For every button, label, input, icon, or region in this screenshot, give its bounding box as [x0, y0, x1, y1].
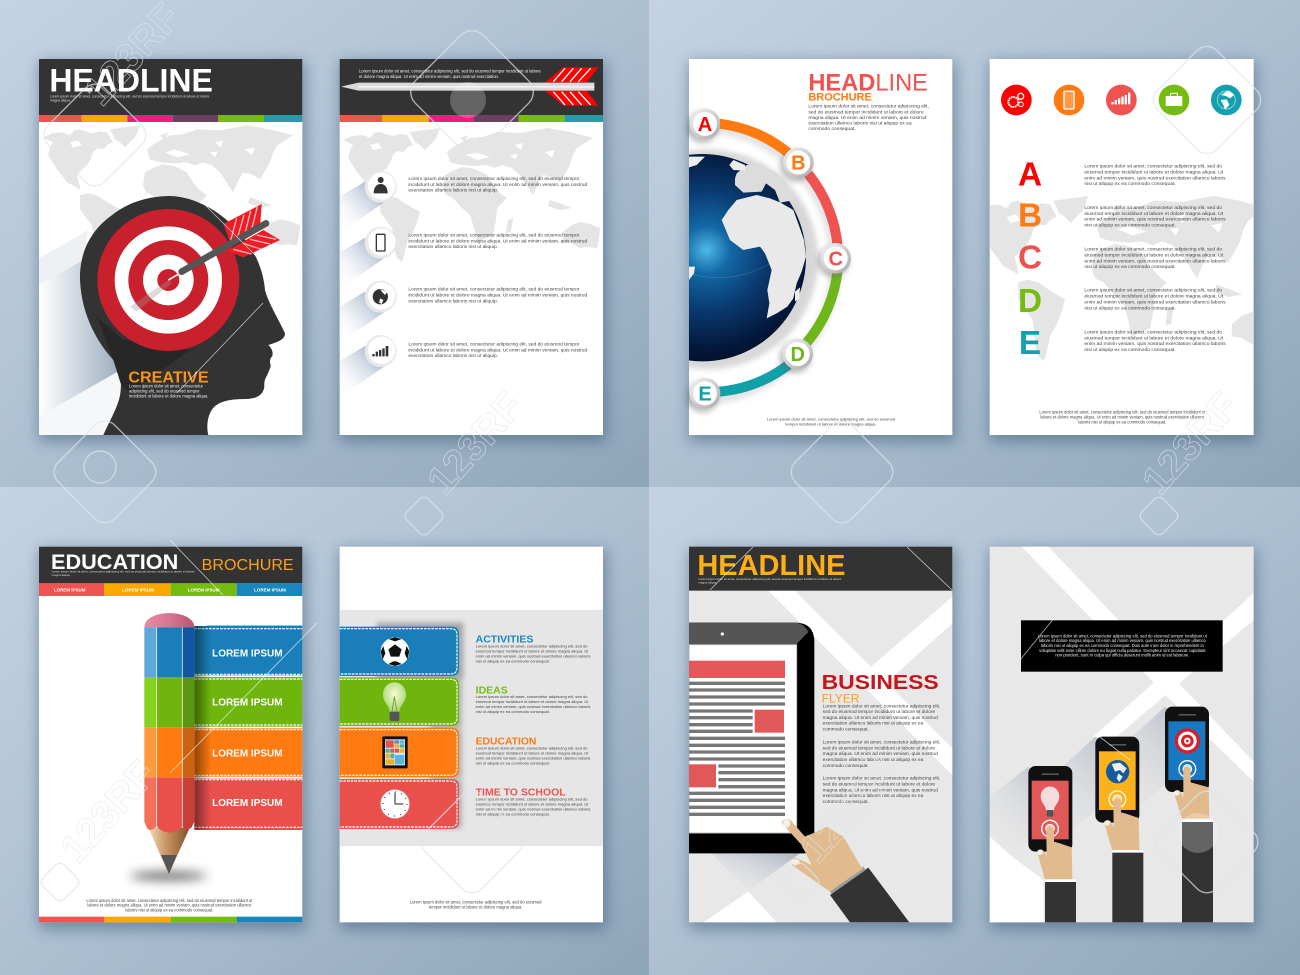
tablet [689, 623, 814, 853]
tablet shadow [712, 854, 800, 883]
node A: A [698, 114, 712, 136]
colour strip [340, 115, 603, 122]
title: headline: HEADLINE [808, 71, 928, 97]
text 3: exercitation ullamco laboris nisi ut aliquip. [408, 298, 498, 304]
text B: eiusmod tempor incididunt ut labore et dolore magna aliqua. Ut [1084, 211, 1224, 217]
text 1: incididunt ut labore et dolore magna aliqua. Ut enim ad minim veniam, quis nostrud [408, 182, 587, 188]
phone 1 with hand [1028, 766, 1076, 922]
footer text [1039, 410, 1206, 425]
icon: phone [1054, 85, 1084, 115]
target shadow on head [97, 317, 190, 393]
globe shadow [689, 148, 820, 372]
paragraph 2 [823, 740, 940, 769]
tab: ideas [340, 677, 462, 728]
header bar [689, 547, 952, 591]
text: activities: Lorem ipsum dolor sit amet, consectetur adipiscing elit, sed do [476, 644, 588, 649]
watermark marks: 123RF [1134, 384, 1247, 503]
ribbons: LOREM IPSUM [212, 698, 283, 709]
panel: A to E list page [975, 59, 1275, 442]
intro text: exercitation ullamco laboris nisi ut aliquip ex ea [808, 120, 912, 126]
footer text: laboris nisi ut aliquip ex ea commodo consequat. [125, 908, 213, 913]
item: person icon [340, 171, 397, 230]
phone long shadows [993, 766, 1030, 830]
text: time to school: enim ad minim veniam, quis nostrud exercitation ullamco laboris [476, 806, 590, 811]
text D: Lorem ipsum dolor sit amet, consectetur adipiscing elit, sed do [1084, 288, 1222, 294]
paragraph 3 [823, 776, 940, 805]
dart [168, 204, 280, 280]
text 1: Lorem ipsum dolor sit amet, consectetur adipiscing elit, sed do eiusmod tempor [408, 176, 580, 182]
node A [687, 109, 720, 143]
footer text: tempor incididunt ut labore et dolore magna aliqua. [429, 904, 522, 909]
menu tabs: LOREM IPSUM [254, 588, 286, 593]
node D [779, 339, 813, 373]
menu tabs [39, 583, 302, 596]
text: education: eiusmod tempor incididunt ut labore et dolore magna aliqua. Ut [476, 750, 589, 755]
paragraph 2: Lorem ipsum dolor sit amet, consectetur adipiscing elit, [823, 740, 940, 746]
header bar [39, 547, 302, 583]
phone 3 with hand [1165, 707, 1213, 922]
panel: education brochure page [39, 547, 306, 929]
text A: nisi ut aliquip ex ea commodo consequat. [1084, 181, 1176, 187]
colour strip [39, 115, 302, 122]
item: phone icon [340, 227, 397, 286]
text 4: Lorem ipsum dolor sit amet, consectetur adipiscing elit, sed do eiusmod tempor [408, 342, 580, 348]
pencil [130, 613, 207, 880]
intro text: magna aliqua. Ut enim ad minim veniam, quis nostrud [808, 115, 927, 121]
text: ideas: Lorem ipsum dolor sit amet, consectetur adipiscing elit, sed do [476, 694, 588, 699]
footer text: Lorem ipsum dolor sit amet, consectetur adipiscing elit, sed do eiusmod [410, 899, 542, 904]
panel: business flyer page [689, 547, 956, 929]
white diagonal bands [703, 591, 952, 922]
bottom strip [39, 917, 302, 922]
head silhouette [80, 196, 285, 435]
text D: eiusmod tempor incididunt ut labore et dolore magna aliqua. Ut [1084, 294, 1224, 300]
text: ideas: eiusmod tempor incididunt ut labore et dolore magna aliqua. Ut [476, 699, 589, 704]
text box: voluptate velit esse cillum dolore eu fugiat nulla pariatur. Excepteur sint occaecat cupidatat [1039, 648, 1206, 653]
text A: enim ad minim veniam, quis nostrud exercitation ullamco laboris [1084, 175, 1226, 181]
ribbons [194, 625, 302, 830]
text: activities: eiusmod tempor incididunt ut labore et dolore magna aliqua. Ut [476, 649, 589, 654]
paragraph 1: commodo consequat. [823, 727, 869, 733]
text box [1021, 620, 1223, 672]
text 3: Lorem ipsum dolor sit amet, consectetur adipiscing elit, sed do eiusmod tempor [408, 287, 580, 293]
ribbons: LOREM IPSUM [212, 649, 283, 660]
creative body text [129, 384, 208, 399]
text E [1084, 329, 1226, 353]
title: headline: HEADLINE [697, 550, 845, 582]
text: education: Lorem ipsum dolor sit amet, consectetur adipiscing elit, sed do [476, 745, 588, 750]
menu tabs: LOREM IPSUM [188, 588, 220, 593]
text: time to school: eiusmod tempor incididunt ut labore et dolore magna aliqua. Ut [476, 801, 589, 806]
letter D: D [1018, 283, 1042, 320]
text E: Lorem ipsum dolor sit amet, consectetur adipiscing elit, sed do [1084, 329, 1222, 335]
panel: activities page [340, 547, 606, 929]
menu tabs: LOREM IPSUM [122, 588, 154, 593]
header text [52, 569, 195, 577]
creative body text: Lorem ipsum dolor sit amet, consectetur [129, 384, 204, 389]
paragraph 3: magna aliqua. Ut enim ad minim veniam, quis nostrud [823, 787, 938, 793]
text 4 [408, 342, 587, 359]
text 3 [408, 287, 587, 304]
target [97, 209, 239, 351]
grey band [340, 610, 603, 846]
creative body text: incididunt ut labore et dolore magna aliqua. [129, 394, 208, 399]
intro text [808, 103, 929, 132]
paragraph 1: exercitation ullamco laboris nisi ut aliquip ex ea [823, 721, 924, 727]
header text [359, 69, 542, 79]
text B [1084, 205, 1226, 229]
paragraph 2: commodo consequat. [823, 763, 869, 769]
footer text: labore et dolore magna aliqua. Ut enim ad minim veniam, quis nostrud exercitation ullamco [87, 903, 252, 908]
hand with sleeve [782, 819, 909, 922]
ring shadow [689, 120, 840, 406]
subtitle: brochure: BROCHURE [808, 92, 872, 104]
tab: activities [340, 623, 463, 679]
tab: time to school [340, 779, 462, 829]
text: time to school [476, 797, 590, 816]
creative heading: CREATIVE [128, 369, 209, 386]
text: ideas: nisi ut aliquip ex ea commodo consequat. [476, 709, 550, 714]
header text: et dolore magna aliqua. Ut enim ad minim veniam, quis nostrud exercitation. [359, 74, 499, 79]
node C: C [828, 248, 843, 270]
text D: nisi ut aliquip ex ea commodo consequat. [1084, 305, 1176, 311]
text A: eiusmod tempor incididunt ut labore et dolore magna aliqua. Ut [1084, 169, 1224, 175]
icon: growth chart [1106, 85, 1137, 115]
text 4: exercitation ullamco laboris nisi ut aliquip. [408, 353, 498, 359]
text: education [476, 745, 590, 765]
text 2: exercitation ullamco laboris nisi ut aliquip. [408, 244, 498, 250]
text: time to school: Lorem ipsum dolor sit amet, consectetur adipiscing elit, sed do [476, 797, 588, 802]
text D [1084, 288, 1226, 311]
paragraph 3: Lorem ipsum dolor sit amet, consectetur adipiscing elit, [823, 776, 940, 782]
footer text: tempor incididunt ut labore et dolore magna aliqua. [785, 422, 877, 427]
heading: ideas: IDEAS [476, 686, 508, 697]
node B: B [791, 153, 806, 175]
footer text [410, 899, 542, 909]
footer text: Lorem ipsum dolor sit amet, consectetur adipiscing elit, sed do eiusmod tempor incididunt ut [86, 898, 253, 903]
panel: icon list page [340, 59, 606, 442]
node C [817, 243, 851, 278]
footer text: laboris nisi ut aliquip ex ea commodo consequat. [1078, 420, 1166, 425]
text C: Lorem ipsum dolor sit amet, consectetur adipiscing elit, sed do [1084, 246, 1222, 252]
text D: enim ad minim veniam, quis nostrud exercitation ullamco laboris [1084, 300, 1226, 306]
header body text: Lorem ipsum dolor sit amet, consectetur adipiscing elit, sed do eiusmod tempor incididunt ut labore et dolore [50, 95, 210, 99]
header text: Lorem ipsum dolor sit amet, consectetur adipiscing elit, sed do eiusmod tempor incididunt ut labore [359, 69, 542, 74]
watermark marks: 123RF [419, 384, 532, 503]
text A: Lorem ipsum dolor sit amet, consectetur adipiscing elit, sed do [1084, 163, 1222, 169]
header text: magna aliqua. [698, 581, 717, 585]
text B: enim ad minim veniam, quis nostrud exercitation ullamco laboris [1084, 217, 1226, 223]
ring segments [719, 124, 838, 392]
text: education: enim ad minim veniam, quis nostrud exercitation ullamco laboris [476, 755, 590, 760]
text 2: incididunt ut labore et dolore magna aliqua. Ut enim ad minim veniam, quis nostrud [408, 238, 587, 244]
paragraph 1 [823, 703, 940, 733]
header text: Lorem ipsum dolor sit amet, consectetur adipiscing elit, sed do eiusmod tempor incididunt ut labore et dolore [52, 569, 195, 573]
paragraph 1: Lorem ipsum dolor sit amet, consectetur adipiscing elit, [823, 703, 940, 709]
intro text: sed do eiusmod tempor incididunt ut labore et dolore [808, 109, 924, 115]
letter C: C [1018, 239, 1042, 276]
watermark marks: 123RF [792, 752, 905, 871]
text: activities: nisi ut aliquip ex ea commodo consequat. [476, 659, 550, 664]
text 3: incididunt ut labore et dolore magna aliqua. Ut enim ad minim veniam, quis nostrud [408, 292, 587, 298]
text 4: incididunt ut labore et dolore magna aliqua. Ut enim ad minim veniam, quis nostrud [408, 347, 587, 353]
text A [1084, 163, 1226, 187]
title: brochure: BROCHURE [202, 557, 294, 574]
paragraph 2: magna aliqua. Ut enim ad minim veniam, quis nostrud [823, 751, 938, 757]
letter B: B [1018, 198, 1042, 235]
text 1 [408, 176, 587, 194]
title: education: EDUCATION [51, 550, 178, 574]
footer text [86, 898, 253, 913]
text B: nisi ut aliquip ex ea commodo consequat. [1084, 223, 1176, 229]
heading: activities: ACTIVITIES [476, 635, 533, 646]
item: globe icon [340, 281, 397, 340]
text B: Lorem ipsum dolor sit amet, consectetur adipiscing elit, sed do [1084, 205, 1222, 211]
paragraph 3: exercitation ullamco laboris nisi ut aliquip ex ea [823, 793, 924, 799]
panel: phones page [990, 547, 1256, 929]
text: activities [476, 644, 590, 664]
text E: eiusmod tempor incididunt ut labore et dolore magna aliqua. Ut [1084, 335, 1224, 341]
header bar [340, 59, 603, 115]
intro text: Lorem ipsum dolor sit amet, consectetur adipiscing elit, [808, 103, 929, 109]
panel: globe ring page [680, 53, 964, 450]
text box: laboris nisi ut aliquip ex ea commodo consequat. Duis aute irure dolor in reprehenderit in [1041, 643, 1204, 648]
paragraph 3: commodo consequat. [823, 799, 869, 805]
dart arrow [341, 67, 598, 106]
header body text [50, 95, 210, 103]
letter E: E [1019, 325, 1041, 362]
title: business: BUSINESS [822, 672, 939, 694]
ribbons: LOREM IPSUM [212, 798, 283, 809]
ribbons: LOREM IPSUM [212, 748, 283, 759]
world map [43, 126, 300, 246]
text 1: exercitation ullamco laboris nisi ut aliquip. [408, 188, 498, 194]
text box: non proident, sunt in culpa qui officia deserunt mollit anim id est laborum. [1055, 653, 1189, 658]
intro text: commodo consequat. [808, 126, 856, 132]
heading: education: EDUCATION [476, 737, 536, 748]
title: headline: HEADLINE [49, 63, 213, 99]
white diagonal bands [990, 547, 1254, 922]
paragraph 3: sed do eiusmod tempor incididunt ut labore et dolore [823, 781, 935, 787]
panel: creative headline page [39, 59, 306, 442]
header text: Lorem ipsum dolor sit amet, consectetur adipiscing elit, sed do eiusmod tempor incididunt ut labore et dolore [698, 577, 842, 581]
footer text: labore et dolore magna aliqua. Ut enim ad minim veniam, quis nostrud exercitation ullamco [1040, 415, 1205, 420]
text: activities: enim ad minim veniam, quis nostrud exercitation ullamco laboris [476, 654, 590, 659]
text E: nisi ut aliquip ex ea commodo consequat. [1084, 347, 1176, 353]
watermark marks: 123RF [52, 752, 165, 871]
footer text: Lorem ipsum dolor sit amet, consectetur adipiscing elit, sed do eiusmod tempor incididunt ut [1039, 410, 1206, 415]
paragraph 1: sed do eiusmod tempor incididunt ut labore et dolore [823, 709, 935, 715]
header text: magna aliqua. [52, 573, 71, 577]
node D: D [790, 344, 805, 366]
text box: Lorem ipsum dolor sit amet, consectetur adipiscing elit, sed do eiusmod tempor incididunt ut [1038, 633, 1208, 638]
node E: E [698, 383, 712, 405]
node E [687, 378, 720, 413]
text 2: Lorem ipsum dolor sit amet, consectetur adipiscing elit, sed do eiusmod tempor [408, 232, 580, 238]
header text [698, 577, 842, 585]
node B [780, 147, 814, 182]
text C [1084, 246, 1226, 270]
phone 2 with hand [1095, 737, 1143, 922]
text C: nisi ut aliquip ex ea commodo consequat. [1084, 264, 1176, 270]
icon: briefcase [1159, 85, 1189, 115]
creative body text: adipiscing elit, sed do eiusmod tempor [129, 389, 200, 394]
world map [990, 196, 1254, 361]
item: bars icon [340, 335, 397, 394]
text 2 [408, 232, 587, 250]
header body text: magna aliqua. [50, 99, 71, 103]
footer text [767, 417, 895, 427]
paragraph 2: exercitation ullamco laboris nisi ut aliquip ex ea [823, 757, 924, 763]
letter A: A [1018, 157, 1042, 194]
paragraph 2: sed do eiusmod tempor incididunt ut labore et dolore [823, 745, 935, 751]
text: education: nisi ut aliquip ex ea commodo consequat. [476, 760, 550, 765]
heading: time to school: TIME TO SCHOOL [476, 788, 566, 799]
menu tabs: LOREM IPSUM [54, 588, 86, 593]
world map [343, 128, 600, 262]
text box: labore et dolore magna aliqua. Ut enim ad minim veniam, quis nostrud exercitation ullamco [1039, 638, 1207, 643]
subtitle: flyer: FLYER [822, 692, 860, 706]
text: time to school: nisi ut aliquip ex ea commodo consequat. [476, 811, 550, 816]
text: ideas [476, 694, 590, 714]
text E: enim ad minim veniam, quis nostrud exercitation ullamco laboris [1084, 341, 1226, 347]
footer text: Lorem ipsum dolor sit amet, consectetur adipiscing elit, sed do eiusmod [767, 417, 895, 422]
long shadow of head [39, 230, 127, 435]
text C: enim ad minim veniam, quis nostrud exercitation ullamco laboris [1084, 258, 1226, 264]
text: ideas: enim ad minim veniam, quis nostrud exercitation ullamco laboris [476, 704, 590, 709]
icon: globe [1211, 85, 1242, 115]
paragraph 1: magna aliqua. Ut enim ad minim veniam, quis nostrud [823, 715, 938, 721]
header bar [39, 59, 302, 115]
icon: gears [1001, 85, 1032, 115]
text C: eiusmod tempor incididunt ut labore et dolore magna aliqua. Ut [1084, 252, 1224, 258]
tab: education [340, 728, 462, 778]
globe [689, 154, 806, 362]
